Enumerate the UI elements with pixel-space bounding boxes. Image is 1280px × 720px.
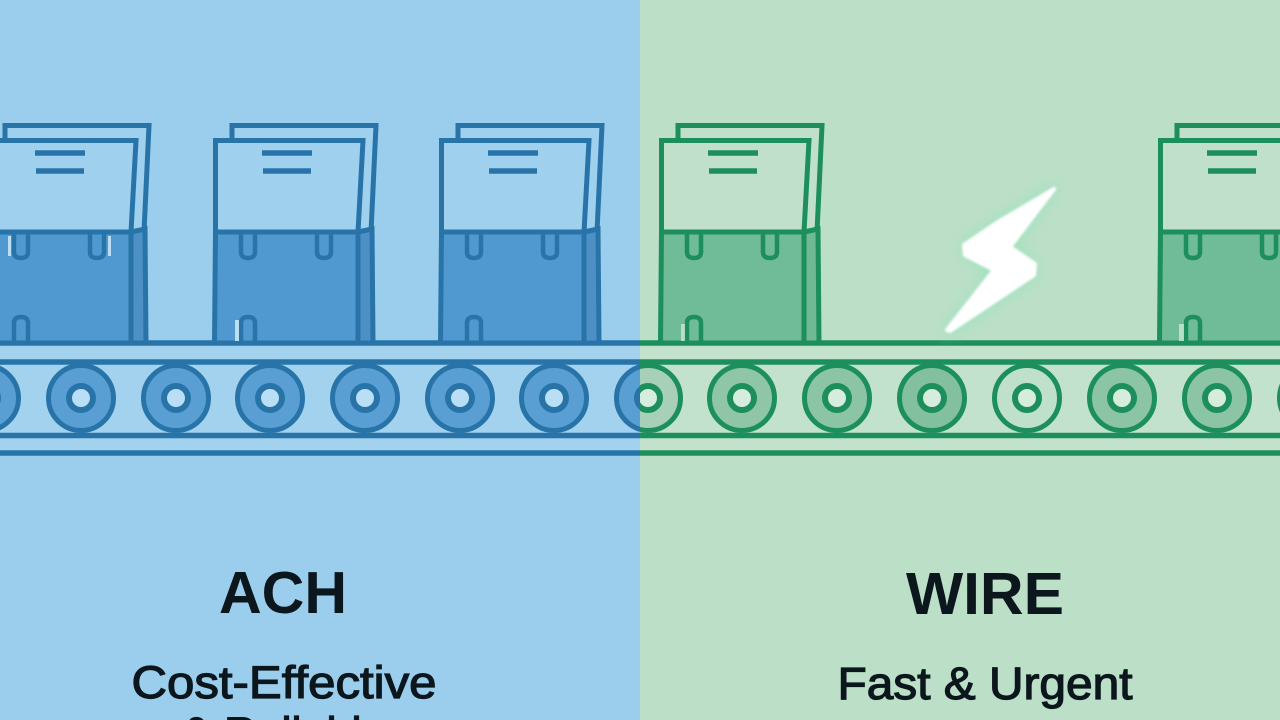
panel: ACH	[0, 123, 640, 720]
WIRE rollers	[616, 366, 1280, 430]
WIRE package 2	[1160, 126, 1280, 343]
panel: WIRE	[616, 0, 1280, 720]
ACH tab highlights	[8, 236, 239, 341]
ACH subtitle: Cost-Effective	[132, 657, 436, 708]
icon: lightning bolt	[946, 187, 1055, 332]
ACH title: ACH	[219, 560, 347, 626]
WIRE title: WIRE	[906, 561, 1064, 627]
ACH rollers	[0, 366, 682, 430]
WIRE subtitle: Fast & Urgent	[838, 658, 1133, 709]
ACH package 3	[440, 126, 602, 343]
ACH package 2	[214, 126, 376, 343]
ACH package 1	[0, 126, 149, 343]
WIRE tab highlights	[681, 324, 1184, 341]
WIRE package 1	[660, 126, 822, 343]
WIRE conveyor belt	[640, 343, 1280, 453]
ACH conveyor belt	[0, 343, 640, 453]
